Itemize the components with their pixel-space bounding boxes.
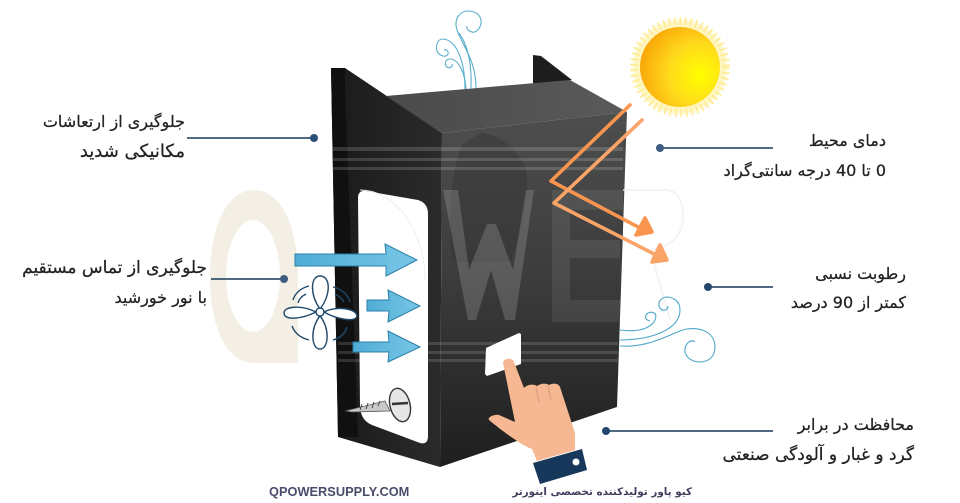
callout: vibration: مکانیکی شدید — [80, 141, 185, 162]
reflected sun rays — [551, 105, 667, 262]
callout: ambient temperature: 0 تا 40 درجه سانتی‌گراد — [724, 161, 886, 181]
callout: ambient temperature: دمای محیط — [809, 131, 886, 150]
sun — [633, 20, 727, 114]
callout: relative humidity — [704, 264, 906, 313]
white card on box — [485, 333, 521, 376]
callout: relative humidity: کمتر از 90 درصد — [791, 293, 906, 313]
callout: sunlight: با نور خورشید — [115, 288, 207, 308]
callout: relative humidity: رطوبت نسبی — [815, 264, 906, 284]
callout: vibration — [43, 112, 318, 162]
wind swirl: right — [620, 297, 715, 362]
front face — [440, 112, 627, 467]
icon: screw — [345, 386, 414, 424]
callout: ambient temperature — [656, 131, 886, 181]
callout: sunlight — [22, 257, 288, 308]
icon: pointing hand — [489, 359, 587, 484]
side panel — [331, 68, 442, 467]
watermark bands and letters over the box — [333, 133, 683, 362]
left flange — [331, 68, 358, 437]
back flap — [533, 55, 572, 84]
callout: dust protection: گرد و غبار و آلودگی صنعتی — [723, 443, 915, 465]
watermark: Q letter — [210, 190, 298, 363]
shirt cuff — [533, 449, 587, 484]
top face — [386, 80, 627, 133]
callout: vibration: جلوگیری از ارتعاشات — [43, 112, 185, 132]
footer: company tagline: کیو پاور تولیدکننده تخصصی اینورتر — [511, 486, 693, 498]
callout: dust protection: محافظت در برابر — [797, 415, 914, 435]
footer: website: QPOWERSUPPLY.COM — [269, 484, 409, 499]
wind swirl: top — [437, 11, 481, 89]
side window — [358, 191, 428, 443]
callout: sunlight: جلوگیری از تماس مستقیم — [22, 257, 207, 278]
icon: fan — [284, 276, 357, 349]
enclosure box — [331, 55, 627, 467]
blue airflow arrows — [295, 244, 420, 362]
callout: dust protection — [602, 415, 915, 465]
